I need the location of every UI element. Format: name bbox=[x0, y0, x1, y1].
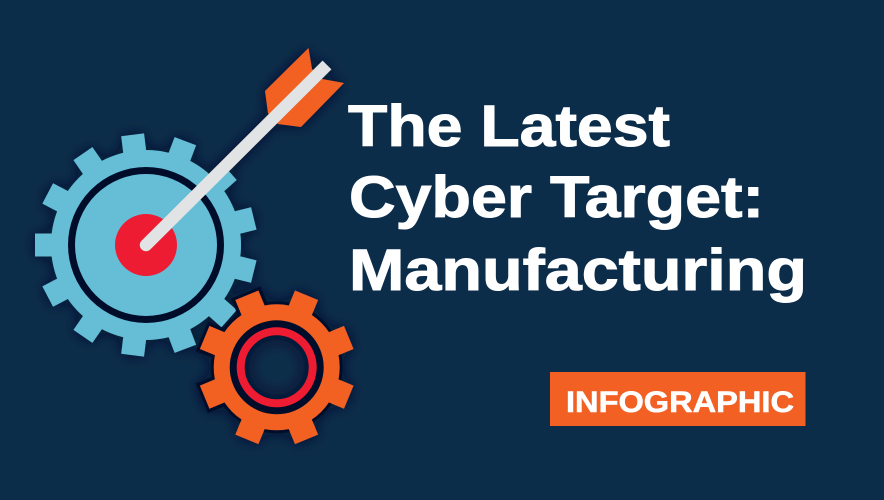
title: Cyber Target: bbox=[349, 165, 764, 230]
title bbox=[348, 94, 807, 303]
illustration: gears and arrow bbox=[35, 48, 354, 444]
title: Manufacturing bbox=[349, 238, 807, 303]
badge: infographic: INFOGRAPHIC bbox=[566, 386, 794, 419]
badge: infographic bbox=[550, 372, 806, 426]
title: The Latest bbox=[348, 94, 670, 159]
icon: small orange gear bbox=[196, 286, 354, 444]
icon: arrow bbox=[140, 48, 344, 251]
icon: large blue gear target bbox=[35, 133, 257, 357]
